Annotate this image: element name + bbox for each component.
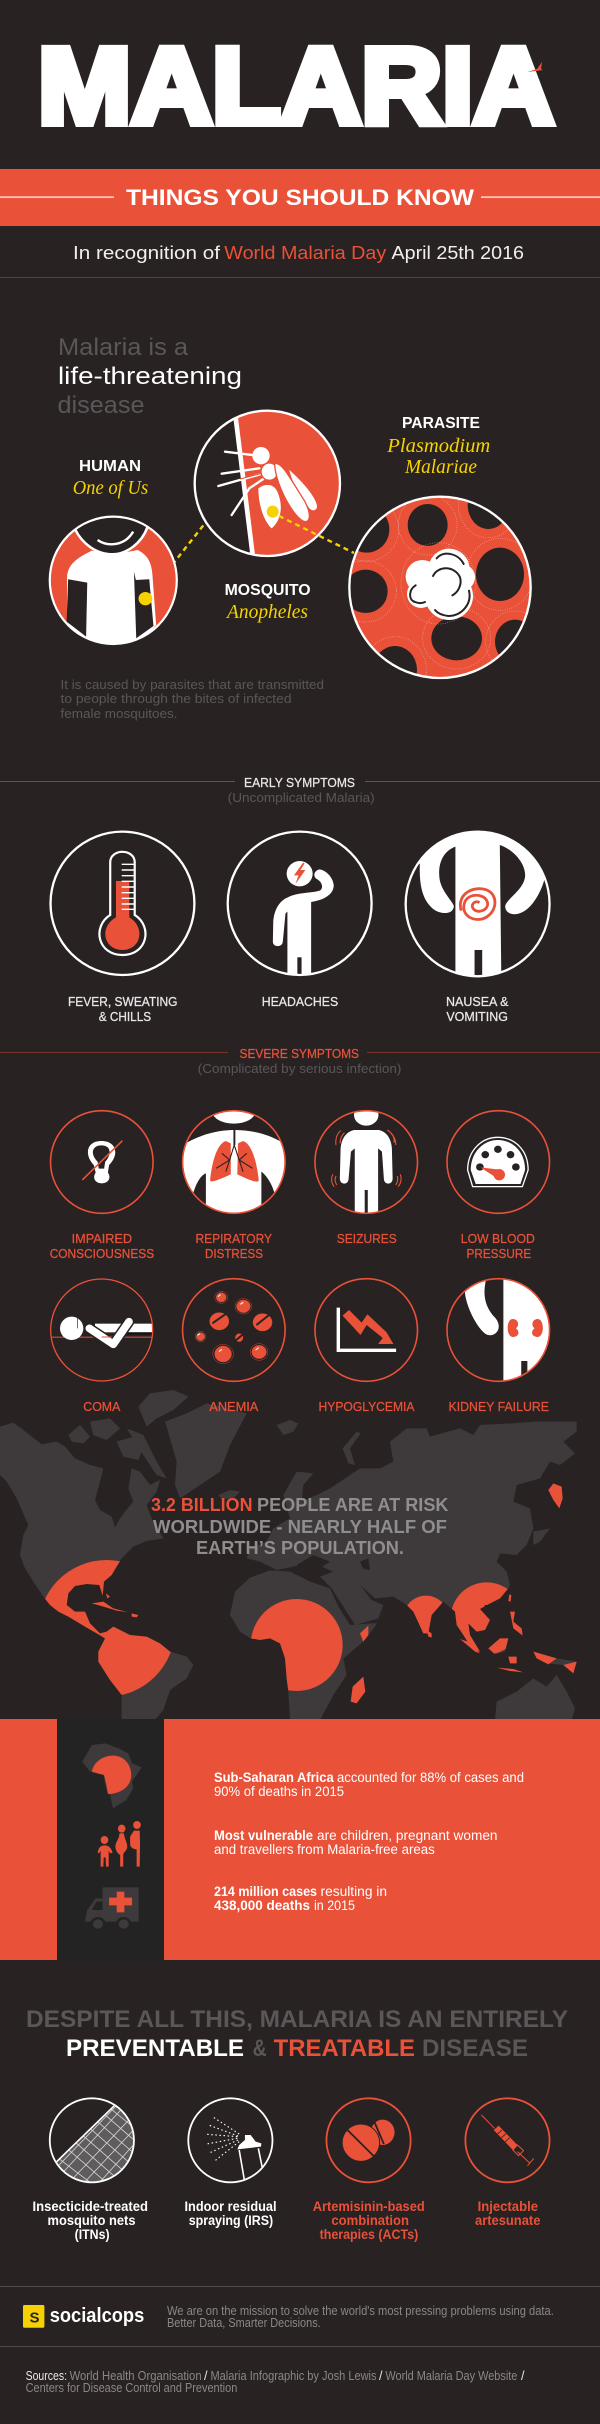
heading: severe symptoms: SEVERE SYMPTOMS — [240, 1047, 359, 1061]
labels: severe symptoms row 2: COMA — [83, 1400, 121, 1414]
labels: early symptoms: & CHILLS — [99, 1010, 151, 1024]
labels: early symptoms: FEVER, SWEATING — [68, 995, 178, 1009]
label: parasite — [386, 415, 490, 478]
text: key statistics: 214 million cases — [214, 1884, 317, 1899]
title: MALARIA — [38, 25, 554, 146]
icon: kidney failure — [447, 1277, 551, 1384]
icon: thermometer — [51, 832, 194, 975]
text: key statistics: Most vulnerable — [214, 1828, 313, 1843]
text: key statistics: resulting in — [320, 1884, 387, 1899]
text: key statistics — [214, 1770, 524, 1913]
icon: injectable artesunate syringe — [465, 2098, 550, 2182]
labels: severe symptoms row 2: HYPOGLYCEMIA — [318, 1400, 415, 1414]
subtitle: world malaria day — [73, 243, 524, 263]
statement: 3.2 billion at risk: 3.2 BILLION — [151, 1495, 252, 1515]
icon: hypoglycemia chart — [315, 1279, 418, 1381]
text: key statistics: 90% of deaths in 2015 — [214, 1784, 344, 1799]
labels: prevention and treatment: mosquito nets — [48, 2213, 136, 2228]
heading: preventable and treatable: & — [253, 2035, 267, 2062]
text: key statistics: Sub-Saharan Africa — [214, 1770, 334, 1785]
label: human — [73, 458, 148, 499]
statement: 3.2 billion at risk — [151, 1495, 448, 1558]
heading: early symptoms: (Uncomplicated Malaria) — [228, 790, 375, 805]
heading: preventable and treatable: DESPITE ALL THIS, MALARIA IS AN ENTIRELY — [26, 2006, 568, 2033]
labels: severe symptoms row 1 — [50, 1232, 535, 1261]
label: parasite: Malariae — [404, 456, 477, 478]
icon: human — [46, 513, 180, 647]
subtitle: world malaria day: April 25th 2016 — [392, 243, 524, 263]
label: human: HUMAN — [79, 458, 141, 475]
labels: prevention and treatment: Artemisinin-based — [313, 2199, 425, 2214]
text: sources: World Malaria Day Website — [385, 2369, 517, 2383]
labels: early symptoms: HEADACHES — [262, 995, 338, 1009]
label: human: One of Us — [73, 477, 148, 499]
icon: insecticide-treated nets — [48, 2097, 135, 2184]
description: caused by parasites: It is caused by parasites that are transmitted — [60, 677, 324, 692]
panel: icon column — [57, 1719, 164, 1960]
label: parasite: Plasmodium — [386, 435, 490, 457]
text: mission statement: Better Data, Smarter Decisions. — [167, 2316, 321, 2330]
statement: 3.2 billion at risk: PEOPLE ARE AT RISK — [257, 1495, 448, 1515]
text: sources: Centers for Disease Control and Prevention — [26, 2381, 237, 2395]
label: mosquito: MOSQUITO — [225, 582, 311, 599]
labels: severe symptoms row 2: KIDNEY FAILURE — [448, 1400, 549, 1414]
text: sources: Malaria Infographic by Josh Lewis — [210, 2369, 376, 2383]
subtitle: world malaria day: World Malaria Day — [224, 243, 386, 263]
heading: early symptoms — [0, 776, 600, 805]
labels: early symptoms — [68, 995, 509, 1024]
label: mosquito — [225, 582, 311, 623]
world map — [0, 1390, 298, 1720]
statement: 3.2 billion at risk: WORLDWIDE - NEARLY HALF OF — [153, 1517, 447, 1537]
icon: vulnerable people — [98, 1821, 141, 1867]
icon: parasite in blood cells — [348, 496, 532, 680]
description: caused by parasites — [60, 677, 324, 721]
icon: respiratory distress — [182, 1110, 286, 1214]
labels: severe symptoms row 2 — [83, 1400, 549, 1414]
banner: things you should know — [0, 169, 600, 226]
label: parasite: PARASITE — [402, 415, 480, 432]
heading: severe symptoms: (Complicated by serious infection) — [198, 1061, 401, 1076]
text: key statistics: and travellers from Malaria-free areas — [214, 1842, 435, 1857]
icon: impaired consciousness — [51, 1111, 153, 1213]
banner: things you should know: THINGS YOU SHOULD KNOW — [126, 185, 474, 210]
icon: headache person — [228, 832, 372, 980]
labels: severe symptoms row 1: REPIRATORY — [196, 1232, 273, 1246]
labels: early symptoms: VOMITING — [446, 1010, 508, 1024]
text: sources — [26, 2369, 525, 2395]
labels: prevention and treatment: therapies (ACTs) — [320, 2227, 418, 2242]
connector: mosquito to parasite — [279, 516, 354, 553]
icon: artemisinin-based combination therapies — [326, 2098, 411, 2182]
labels: severe symptoms row 1: CONSCIOUSNESS — [50, 1247, 154, 1261]
icon: indoor residual spraying — [188, 2098, 272, 2183]
heading: preventable and treatable: PREVENTABLE — [66, 2035, 244, 2062]
description: caused by parasites: female mosquitoes. — [60, 706, 178, 721]
label: mosquito: Anopheles — [225, 601, 308, 623]
text: mission statement — [167, 2304, 554, 2330]
statement: 3.2 billion at risk: EARTH’S POPULATION. — [196, 1538, 404, 1558]
text: sources: / — [521, 2369, 525, 2383]
labels: severe symptoms row 1: IMPAIRED — [72, 1232, 132, 1246]
connector: human to mosquito — [150, 525, 204, 593]
labels: prevention and treatment: spraying (IRS) — [189, 2213, 273, 2228]
text: sources: / — [204, 2369, 208, 2383]
icon: coma — [50, 1279, 153, 1381]
text: mission statement: We are on the mission to solve the world's most pressing problems using data. — [167, 2304, 554, 2318]
icon: nausea person — [402, 832, 555, 980]
text: sources: / — [379, 2369, 383, 2383]
labels: prevention and treatment: artesunate — [475, 2213, 541, 2228]
subtitle: world malaria day: In recognition of — [73, 243, 221, 263]
text: sources: World Health Organisation — [70, 2369, 202, 2383]
text: sources: Sources: — [26, 2369, 67, 2383]
heading: preventable and treatable — [26, 2006, 568, 2062]
icon: ambulance — [85, 1887, 139, 1931]
logo: socialcops: S — [30, 2310, 40, 2326]
heading: malaria is a life-threatening disease: Malaria is a — [58, 334, 189, 361]
icon: seizures — [315, 1104, 418, 1217]
heading: malaria is a life-threatening disease — [58, 334, 242, 419]
labels: severe symptoms row 1: PRESSURE — [466, 1247, 531, 1261]
labels: early symptoms: NAUSEA & — [446, 995, 509, 1009]
heading: early symptoms: EARLY SYMPTOMS — [244, 776, 355, 790]
heading: malaria is a life-threatening disease: life-threatening — [58, 363, 242, 390]
icon: africa map — [82, 1743, 142, 1808]
description: caused by parasites: to people through the bites of infected — [60, 691, 292, 706]
panel: key statistics — [0, 1719, 600, 1960]
labels: prevention and treatment: Indoor residual — [184, 2199, 276, 2214]
labels: prevention and treatment: Injectable — [478, 2199, 538, 2214]
text: key statistics: accounted for 88% of cases and — [337, 1770, 524, 1785]
text: key statistics: 438,000 deaths — [214, 1898, 310, 1913]
labels: severe symptoms row 1: LOW BLOOD — [461, 1232, 535, 1246]
labels: severe symptoms row 1: DISTRESS — [205, 1247, 263, 1261]
heading: malaria is a life-threatening disease: disease — [58, 392, 144, 419]
labels: severe symptoms row 1: SEIZURES — [337, 1232, 397, 1246]
icon: low blood pressure gauge — [447, 1111, 550, 1213]
text: key statistics: are children, pregnant women — [317, 1828, 498, 1843]
icon: anemia blood cells — [183, 1279, 285, 1381]
labels: prevention and treatment: (ITNs) — [75, 2227, 110, 2242]
heading: severe symptoms — [0, 1047, 600, 1076]
text: key statistics: in 2015 — [314, 1898, 355, 1913]
labels: prevention and treatment — [32, 2199, 541, 2242]
icon: mosquito — [195, 411, 343, 558]
logo: socialcops: socialcops — [50, 2305, 144, 2327]
heading: preventable and treatable: TREATABLE — [274, 2035, 415, 2062]
heading: preventable and treatable: DISEASE — [422, 2035, 528, 2062]
labels: severe symptoms row 2: ANEMIA — [209, 1400, 259, 1414]
labels: prevention and treatment: combination — [331, 2213, 409, 2228]
labels: prevention and treatment: Insecticide-treated — [32, 2199, 148, 2214]
